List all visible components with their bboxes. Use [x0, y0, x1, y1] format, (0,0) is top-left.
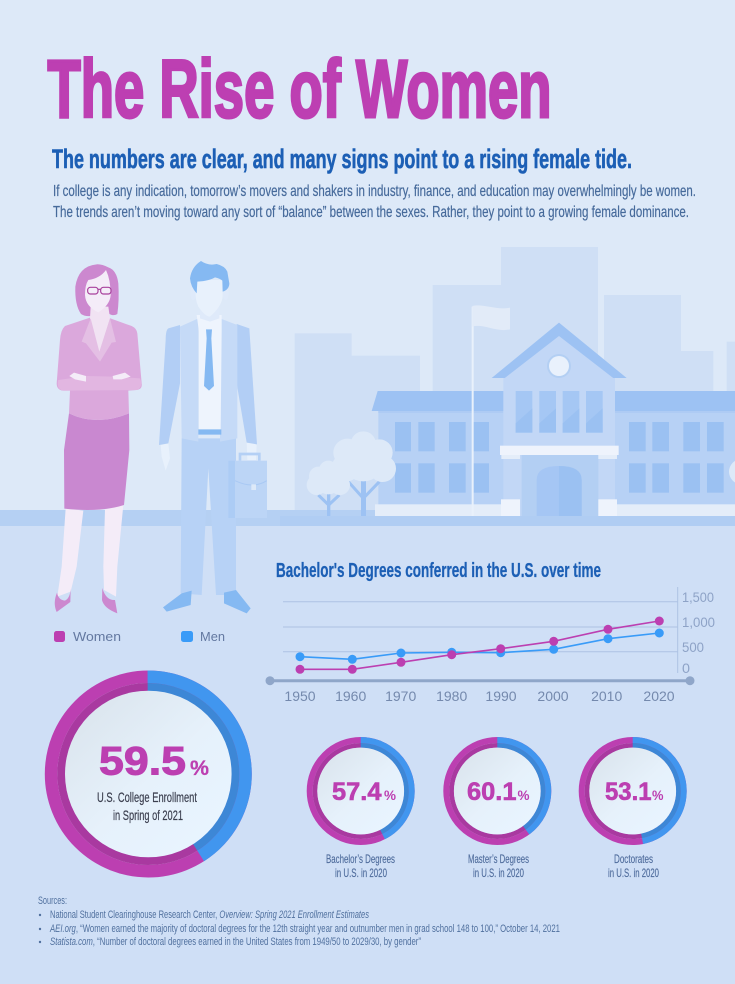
sources: National Student Clearinghouse Research Center, Overview: Spring 2021 Enrollment Estimates: [50, 909, 369, 921]
x axis labels: 1980: [436, 688, 467, 704]
x axis labels: [284, 688, 675, 704]
donut: master's degrees 60.1%: [446, 740, 548, 880]
donut: doctorates 53.1%: in U.S. in 2020: [608, 866, 659, 880]
donut: doctorates 53.1%: Doctorates: [614, 852, 653, 866]
line chart: bachelor's degrees over time: [266, 587, 715, 704]
trees: [307, 431, 735, 516]
ground band: [0, 510, 735, 526]
donut: bachelor's degrees 57.4%: [310, 740, 412, 880]
donut: master's degrees 60.1%: 60.1: [467, 778, 517, 806]
donut: master's degrees 60.1%: Master’s Degrees: [468, 852, 529, 866]
y axis labels: 0: [682, 660, 690, 676]
school building: [280, 323, 735, 526]
donut: college enrollment 59.5%: in Spring of 2021: [113, 807, 183, 823]
women line: [296, 616, 664, 674]
x axis labels: 1990: [485, 688, 517, 704]
woman and man figures: [55, 261, 267, 613]
y axis labels: [682, 589, 715, 676]
donut: doctorates 53.1%: %: [652, 787, 664, 803]
intro text: [53, 183, 696, 221]
skyline buildings: [295, 247, 735, 510]
donut: master's degrees 60.1%: in U.S. in 2020: [473, 866, 524, 880]
donut: bachelor's degrees 57.4%: in U.S. in 2020: [335, 866, 387, 880]
x axis labels: 1970: [385, 688, 416, 704]
x axis labels: 2020: [643, 688, 675, 704]
donut: doctorates 53.1%: [582, 740, 684, 880]
sources: [38, 895, 560, 948]
donut: college enrollment 59.5%: 59.5: [99, 740, 186, 784]
x axis labels: 1960: [335, 688, 366, 704]
sources: Sources:: [38, 895, 67, 907]
flag and flagpole: [472, 305, 510, 516]
donut: master's degrees 60.1%: %: [518, 787, 530, 803]
sources: Statista.com, “Number of doctoral degrees earned in the United States from 1949/50 to 2029/30, by gender”: [50, 936, 421, 948]
donut: college enrollment 59.5%: %: [190, 757, 209, 780]
donut: bachelor's degrees 57.4%: 57.4: [332, 778, 382, 806]
legend: women: [54, 629, 121, 644]
donut: college enrollment 59.5%: [51, 677, 246, 871]
legend: men: [181, 629, 225, 644]
woman figure: [55, 264, 142, 613]
donut: doctorates 53.1%: 53.1: [605, 778, 652, 806]
y axis labels: 1,500: [682, 589, 714, 605]
man figure: [159, 261, 267, 613]
legend: men: Men: [200, 629, 225, 644]
x axis labels: 2010: [591, 688, 622, 704]
donut: college enrollment 59.5%: U.S. College Enrollment: [97, 789, 197, 805]
x axis labels: 2000: [537, 688, 569, 704]
city skyline and school illustration: [280, 247, 735, 526]
men line: [296, 628, 664, 664]
legend: women: Women: [73, 629, 121, 644]
y axis labels: 500: [682, 639, 704, 655]
donut: bachelor's degrees 57.4%: %: [384, 787, 397, 803]
x axis labels: 1950: [284, 688, 316, 704]
legend: [54, 629, 225, 644]
donut: bachelor's degrees 57.4%: Bachelor’s Degrees: [326, 852, 395, 866]
y axis labels: 1,000: [682, 614, 715, 630]
